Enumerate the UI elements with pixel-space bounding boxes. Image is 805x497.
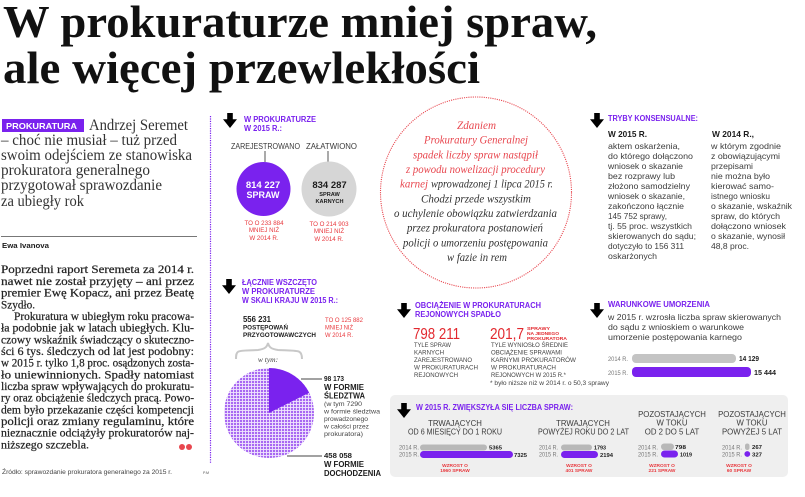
tag: prokuratura: PROKURATURA xyxy=(6,121,77,131)
column: 2014: istnego wniosku xyxy=(711,191,770,201)
icon: arrow xyxy=(590,113,604,128)
title xyxy=(3,0,597,93)
lead text: – choć nie musiał – tuż przed xyxy=(0,132,177,149)
label: dochodzenie: W FORMIE xyxy=(324,460,365,469)
column: 2014: przepisami xyxy=(711,161,753,171)
column: 2015: oskarżonych xyxy=(608,251,657,261)
total proceedings: 556 231 xyxy=(243,314,271,324)
label: zarejestrowano: ZAREJESTROWANO xyxy=(231,142,300,151)
panel: w prokuraturze w 2015 xyxy=(223,113,357,243)
column: 2014 xyxy=(710,129,793,251)
lead text: swoim odejściem ze stanowiska xyxy=(1,147,192,164)
circle: registered xyxy=(236,162,290,216)
label: śledztwo: 98 173 xyxy=(324,376,344,383)
article body: czowy wskaźnik świadczący o skuteczno- xyxy=(1,333,194,346)
label: śledztwo: (w tym 7290 xyxy=(324,402,363,408)
column: 1 to 2 years: TRWAJĄCYCH xyxy=(556,419,610,428)
column: over 5 years: 60 SPRAW xyxy=(727,468,752,474)
column: 1 to 2 years: 401 SPRAW xyxy=(566,468,593,474)
label: śledztwo: W FORMIE xyxy=(324,383,365,392)
bar chart: 15 444 xyxy=(754,368,777,377)
total proceedings: POSTĘPOWAŃ xyxy=(243,324,288,332)
label: dochodzenie xyxy=(324,453,381,478)
column: 1 to 2 years: 2014 R. xyxy=(539,444,558,452)
quote text: przez prokuratora postanowień xyxy=(406,223,543,235)
stat: 798 211: 798 211 xyxy=(413,326,460,343)
column: 2015: wniosek o skazanie xyxy=(607,161,683,171)
label: śledztwo xyxy=(323,376,381,438)
note: resolved change: MNIEJ NIŻ xyxy=(314,228,344,235)
note: resolved change xyxy=(309,221,349,243)
column: 6 months to 1 year: 7325 xyxy=(514,453,527,459)
stat: 201,7: NA JEDNEGO xyxy=(527,331,559,336)
column: 6 months to 1 year: OD 6 MIESIĘCY DO 1 ROKU xyxy=(408,428,502,436)
column: 2015: dotyczyło to 156 311 xyxy=(608,241,684,251)
column: 2 to 5 years: 1019 xyxy=(680,452,692,458)
bar chart xyxy=(608,354,777,377)
label: w tym: w tym: xyxy=(258,355,278,364)
stat: 201,7: TYLE WYNIOSŁO ŚREDNIE xyxy=(491,341,568,349)
circle: resolved: 834 287 xyxy=(312,180,347,191)
column: over 5 years: 2015 R. xyxy=(722,452,742,458)
quote text: Chodzi przede wszystkim xyxy=(421,193,531,205)
column: 2015 xyxy=(607,129,696,261)
column: 6 months to 1 year: 2015 R. xyxy=(399,452,419,458)
column: 2014: o skazanie, wskaźnik xyxy=(711,201,793,211)
label: śledztwo: prokuratora) xyxy=(324,432,363,438)
label: dochodzenie: DOCHODZENIA xyxy=(324,469,381,478)
quote text: Zdaniem xyxy=(457,120,496,132)
icon: arrow xyxy=(222,279,236,294)
column: 2015: do którego dołączono xyxy=(608,151,693,161)
column: 1 to 2 years xyxy=(538,419,629,474)
column: 2014: kierować samo- xyxy=(711,181,774,191)
column: 6 months to 1 year: 1960 SPRAW xyxy=(440,468,470,474)
heading: W 2015 R.: xyxy=(244,124,282,133)
label: załatwiono: ZAŁATWIONO xyxy=(306,142,357,151)
column: 2014: dołączono wniosek xyxy=(711,221,787,231)
column: 1 to 2 years: 2015 R. xyxy=(539,452,558,458)
column: 6 months to 1 year: TRWAJĄCYCH xyxy=(428,419,482,428)
column: 6 months to 1 year: WZROST O xyxy=(442,463,468,469)
column: over 5 years: POZOSTAJĄCYCH xyxy=(718,410,786,419)
article body: Szydło. xyxy=(1,298,35,311)
title: ale więcej przewlekłości xyxy=(3,42,480,93)
label: śledztwo: prowadzonego xyxy=(324,417,369,423)
icon: arrow xyxy=(397,303,411,318)
heading: W SKALI KRAJU W 2015 R.: xyxy=(242,296,338,305)
column: over 5 years: WZROST O xyxy=(726,463,752,469)
description: umorzenie postępowania karnego xyxy=(608,332,742,342)
total proceedings: PRZYGOTOWAWCZYCH xyxy=(243,333,316,339)
panel: warunkowe umorzenia xyxy=(590,300,781,377)
label: śledztwo: ŚLEDZTWA xyxy=(324,392,365,400)
stat: 201,7: 201,7 xyxy=(490,326,524,343)
article body: liczba spraw wpływających do prokuratu- xyxy=(1,380,194,393)
column: 2014: W 2014 R., xyxy=(712,129,754,139)
stat: 201,7: PROKURATORA xyxy=(527,336,568,341)
note: registered change: MNIEJ NIŻ xyxy=(249,227,279,234)
article body: dem było przekazanie części kompetencji xyxy=(1,403,194,416)
stat: 201,7: KARNYMI PROKURATORÓW xyxy=(491,357,576,364)
heading: WARUNKOWE UMORZENIA xyxy=(608,300,710,309)
article body: Poprzedni raport Seremeta za 2014 r. xyxy=(1,263,194,276)
panel: lead article xyxy=(0,117,197,452)
heading: W PROKURATURZE xyxy=(244,115,317,124)
pie chart xyxy=(224,368,314,458)
column: 2015: W 2015 R. xyxy=(608,129,647,139)
total proceedings xyxy=(243,314,316,339)
credit: P.M xyxy=(203,470,209,475)
label: śledztwo: w całości przez xyxy=(323,424,369,430)
heading: TRYBY KONSENSUALNE: xyxy=(608,114,698,123)
column: 2 to 5 years: 2014 R. xyxy=(638,444,658,452)
icon: arrow xyxy=(590,303,604,318)
column: 1 to 2 years: 1793 xyxy=(594,446,606,452)
stat: 798 211: W PROKURATURACH xyxy=(414,366,478,372)
article body xyxy=(1,263,195,452)
column: 2015: skierowanych do sądu; xyxy=(608,231,696,241)
column: 2015: wniosek o skazanie, xyxy=(607,191,685,201)
brace xyxy=(236,343,302,359)
heading xyxy=(415,301,541,319)
lead text: prokuratora generalnego xyxy=(1,162,150,179)
circle: resolved: KARNYCH xyxy=(316,199,343,205)
stat: 201,7 xyxy=(490,326,576,379)
column: 1 to 2 years: 2194 xyxy=(600,453,614,459)
footnote: * było niższe niż w 2014 r. o 50,3 sprawy xyxy=(490,381,609,387)
icon: author mark xyxy=(179,444,192,450)
article body: nawet nie został przyjęty – ani przez xyxy=(1,275,194,288)
article body: policji oraz zmiany regulaminu, które xyxy=(1,415,194,428)
stat: 798 211 xyxy=(413,326,478,379)
note: change: MNIEJ NIŻ xyxy=(325,324,353,332)
column: over 5 years: W TOKU xyxy=(737,418,768,428)
column: 2014: 48,8 proc. xyxy=(711,241,749,251)
column: 2014: nie można było xyxy=(711,171,770,181)
column: 6 months to 1 year xyxy=(399,419,527,474)
column: 2 to 5 years: 2015 R. xyxy=(638,452,658,458)
column: 2015: bez rozprawy lub xyxy=(608,171,675,181)
quote text: o uchylenie obowiązku zatwierdzania xyxy=(394,208,557,220)
quote text: wprowadzonej 1 lipca 2015 r. xyxy=(431,179,553,191)
stat: 798 211: ZAREJESTROWANO xyxy=(414,358,472,364)
label: śledztwo: w formie śledztwa xyxy=(323,410,381,416)
column: 2 to 5 years: W TOKU xyxy=(657,418,688,428)
column: 2 to 5 years: 798 xyxy=(675,445,686,451)
column: over 5 years xyxy=(718,410,786,474)
quote text: w fazie in rem xyxy=(447,252,507,264)
heading: OBCIĄŻENIE W PROKURATURACH xyxy=(415,301,541,310)
article body: ry oraz obciążenie śledczych pracą. Powo- xyxy=(1,392,194,405)
circle: registered: 814 227 xyxy=(246,180,280,191)
lead text: Andrzej Seremet xyxy=(89,117,189,134)
article body: premier Ewę Kopacz, ani przez Beatę xyxy=(1,287,194,300)
column: 6 months to 1 year: 5365 xyxy=(489,446,502,452)
bar chart: 14 129 xyxy=(739,354,759,363)
description: do sądu z wnioskiem o warunkowe xyxy=(608,322,744,332)
quote text: policji o umorzeniu postępowania xyxy=(402,237,548,249)
stat: 798 211: REJONOWYCH xyxy=(414,373,458,379)
quote text: karnej xyxy=(400,179,428,191)
column: 2015: złożono samodzielny xyxy=(608,181,691,191)
column: over 5 years: 2014 R. xyxy=(722,444,742,452)
column: 2015: tj. 55 proc. wszystkich xyxy=(608,221,692,231)
source note: Źródło: sprawozdanie prokuratora generalnego za 2015 r. xyxy=(2,467,172,476)
article body: ło uniewinnionych. Spadły natomiast xyxy=(1,368,195,381)
column: 2015: aktem oskarżenia, xyxy=(608,141,680,151)
note: resolved change: W 2014 R. xyxy=(314,236,344,243)
column: 2014: z obowiązującymi xyxy=(711,151,780,161)
panel: tryby konsensualne xyxy=(590,113,793,261)
lead text: przygotował sprawozdanie xyxy=(1,177,162,194)
panel: obciążenie w prokuraturach xyxy=(397,301,609,387)
heading: REJONOWYCH SPADŁO xyxy=(415,310,501,319)
stat: 798 211: TYLE SPRAW xyxy=(414,343,451,349)
column: 2015: zakończono łącznie xyxy=(608,201,684,211)
column: 2014: spraw, do których xyxy=(711,211,780,221)
stat: 201,7: W PROKURATURACH xyxy=(491,366,556,372)
column: 2 to 5 years: WZROST O xyxy=(649,463,675,469)
column: 2014: w którym zgodnie xyxy=(710,141,781,151)
column: 6 months to 1 year: 2014 R. xyxy=(399,444,419,452)
stat: 201,7: OBCIĄŻENIE SPRAWAMI xyxy=(491,350,562,356)
article body: ści 6 tys. śledczych od lat jest podobny: xyxy=(1,345,194,358)
article body: ła podobnie jak w latach ubiegłych. Klu- xyxy=(1,322,194,335)
author: Ewa Ivanova xyxy=(2,243,49,250)
lead text xyxy=(0,117,192,210)
note: change xyxy=(325,317,364,339)
article body: niższego szczebla. xyxy=(1,439,89,452)
column: 2015: 145 752 sprawy, xyxy=(608,211,667,221)
quote text: Prokuratury Generalnej xyxy=(423,135,528,147)
panel: łącznie wszczęto xyxy=(222,278,381,478)
circle: resolved: SPRAW xyxy=(319,192,340,198)
heading xyxy=(244,115,317,133)
tag: prokuratura xyxy=(2,119,84,132)
note: change: TO O 125 882 xyxy=(325,317,364,324)
column: over 5 years: 327 xyxy=(752,452,762,458)
bar chart: 2014 R. xyxy=(608,356,628,363)
heading: ŁĄCZNIE WSZCZĘTO xyxy=(242,278,317,287)
article body: nieznacznie odciążyły prokuratorów naj- xyxy=(1,427,194,440)
stat: 798 211: KARNYCH xyxy=(414,350,444,356)
lead text: za ubiegły rok xyxy=(1,193,84,210)
panel: zwiększyła się liczba spraw xyxy=(390,395,788,477)
note: change: W 2014 R. xyxy=(325,332,353,339)
heading: W 2015 R. ZWIĘKSZYŁA SIĘ LICZBA SPRAW: xyxy=(416,403,573,412)
column: 2 to 5 years xyxy=(638,410,706,474)
label: dochodzenie: 458 058 xyxy=(324,453,352,460)
quote text xyxy=(394,120,557,264)
column: 2 to 5 years: POZOSTAJĄCYCH xyxy=(638,410,706,419)
callout: quote circle xyxy=(380,97,572,288)
column: 2014: o skazanie, wynosił xyxy=(711,231,785,241)
article body: w 2015 r. tylko 1,8 proc. osądzonych zosta- xyxy=(1,357,194,370)
note: registered change: W 2014 R. xyxy=(249,235,279,242)
article body: Prokuratura w ubiegłym roku pracowa- xyxy=(14,310,194,323)
heading: W PROKURATURZE xyxy=(242,287,316,296)
column: over 5 years: POWYŻEJ 5 LAT xyxy=(722,428,782,436)
description xyxy=(607,312,781,342)
column: 2 to 5 years: OD 2 DO 5 LAT xyxy=(645,428,699,436)
quote text: spadek liczby spraw nastąpił xyxy=(413,149,539,161)
quote text: z powodu nowelizacji procedury xyxy=(405,164,546,176)
circle: registered: SPRAW xyxy=(246,190,280,200)
column: 1 to 2 years: POWYŻEJ ROKU DO 2 LAT xyxy=(538,428,629,436)
note: resolved change: TO O 214 903 xyxy=(309,221,349,228)
stat: 201,7: REJONOWYCH W 2015 R.* xyxy=(491,373,567,379)
stat: 201,7: SPRAWY xyxy=(527,326,550,331)
note: registered change: TO O 233 884 xyxy=(244,220,284,227)
column: 2 to 5 years: 221 SPRAW xyxy=(649,468,676,474)
icon: arrow xyxy=(223,113,237,128)
bar chart: 2015 R. xyxy=(608,370,628,377)
icon: arrow xyxy=(397,403,411,418)
heading xyxy=(242,278,338,305)
column: over 5 years: 267 xyxy=(752,445,762,451)
circle: resolved xyxy=(302,162,356,216)
column: 1 to 2 years: WZROST O xyxy=(566,463,592,469)
description: w 2015 r. wzrosła liczba spraw skierowanych xyxy=(607,312,781,322)
note: registered change xyxy=(244,220,284,242)
